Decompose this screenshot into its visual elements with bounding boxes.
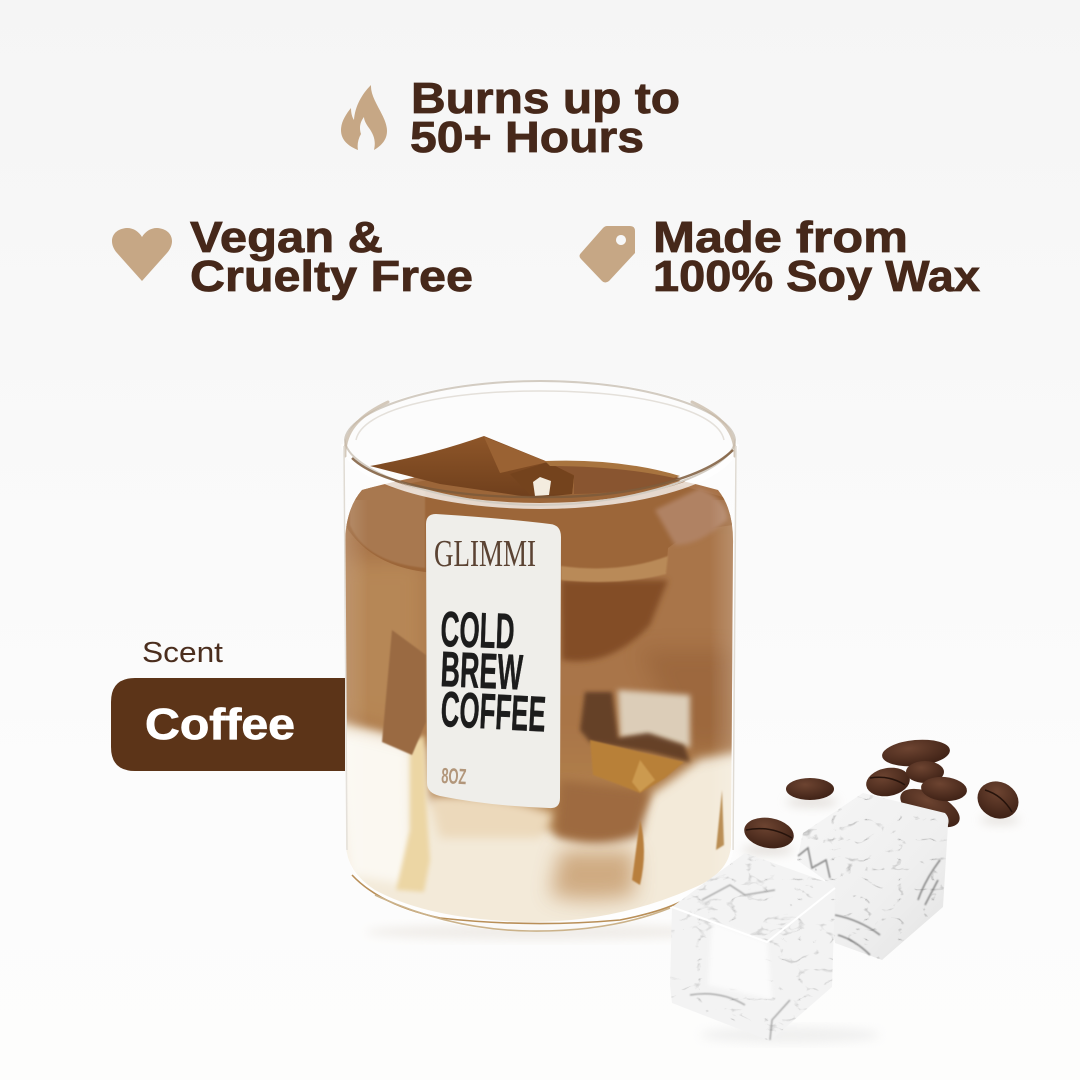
coffee beans (742, 737, 1025, 855)
feature: burn time (341, 74, 680, 162)
heading: Vegan & Cruelty Free: Cruelty Free (190, 252, 473, 301)
icon: tag (580, 226, 635, 282)
ice in milk (396, 735, 430, 892)
swirls (430, 797, 556, 838)
glass jar (343, 380, 737, 932)
far wax surface (545, 461, 680, 494)
wick (533, 477, 551, 496)
icon: heart (112, 228, 172, 281)
ice block at surface (370, 436, 574, 498)
scent label: Scent (142, 637, 223, 669)
ice cubes (665, 785, 955, 1045)
glass rim (344, 381, 736, 850)
cube bright face (708, 922, 772, 1000)
scent pill (111, 678, 345, 771)
heading: Made from 100% Soy Wax: Made from (653, 213, 908, 262)
coffee layer (330, 460, 750, 838)
product name: COFFEE (439, 681, 547, 742)
feature: soy wax (580, 213, 981, 301)
scent pill: Coffee (145, 700, 295, 749)
infographic canvas (111, 82, 1018, 1041)
candle (330, 380, 750, 932)
back ice cube (797, 794, 949, 960)
left lighter column (345, 560, 425, 740)
product name (439, 601, 547, 742)
icon: flame (341, 85, 387, 150)
heading: Vegan & Cruelty Free: Vegan & (190, 213, 383, 262)
ice shadow (700, 1027, 880, 1043)
milk on left (347, 726, 409, 884)
dark ice shape (618, 690, 690, 748)
candle shadow (365, 924, 715, 940)
product label (426, 514, 561, 808)
brand name: GLIMMI (434, 533, 536, 575)
wax body (345, 468, 734, 922)
upper wax surface (346, 479, 732, 572)
product name: COLD (440, 601, 516, 660)
heading: Made from 100% Soy Wax: 100% Soy Wax (653, 252, 981, 301)
product name: BREW (440, 641, 524, 701)
jar base (352, 875, 680, 931)
feature: vegan (112, 213, 473, 301)
size: 8OZ (441, 763, 467, 789)
heading: Burns up to 50+ Hours: 50+ Hours (410, 113, 644, 162)
side highlights (345, 500, 733, 900)
heading: Burns up to 50+ Hours: Burns up to (411, 74, 680, 123)
front ice cube (665, 850, 840, 1045)
